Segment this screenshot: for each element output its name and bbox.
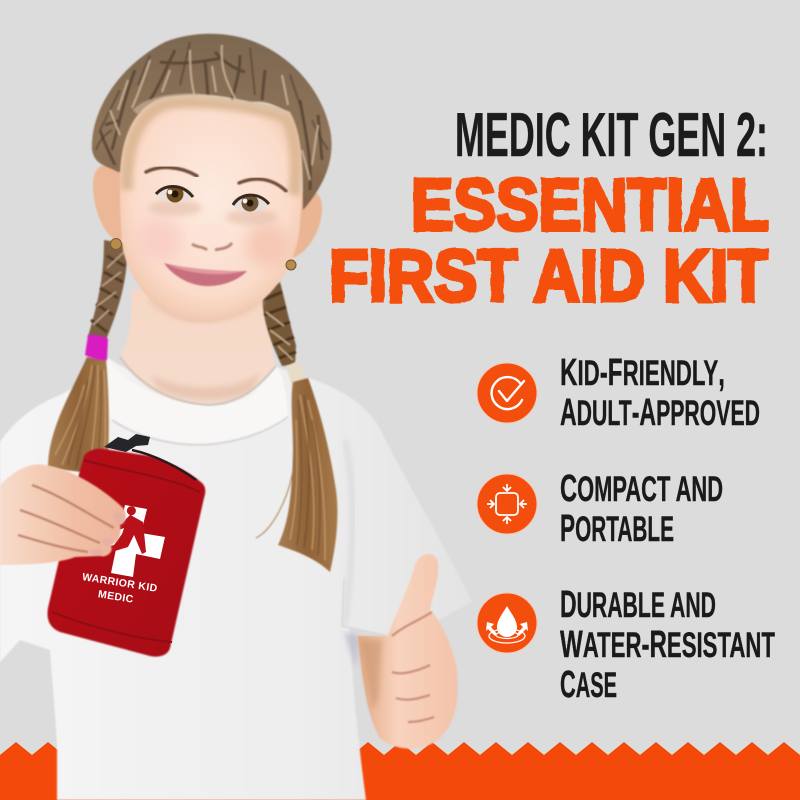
pouch brand label: WARRIOR KID	[81, 571, 158, 595]
eye: left	[156, 186, 193, 202]
pouch brand label: MEDIC	[97, 588, 134, 606]
left braid	[88, 240, 128, 340]
pink hair tie	[85, 335, 108, 360]
forearm shadow	[360, 640, 382, 710]
feature: durable	[477, 584, 775, 706]
finger nails	[90, 513, 124, 556]
earring: left	[110, 238, 122, 250]
eyebrow: right	[239, 179, 286, 191]
cream hair tie	[286, 361, 307, 386]
text: kid-friendly, adult-approved: KID-FRIENDLY,	[560, 352, 725, 394]
text: durable and water-resistant case: DURABLE AND	[560, 584, 716, 626]
forearm and thumbs-up hand	[358, 554, 458, 748]
cheek glow: left	[134, 218, 182, 262]
pouch upper seam	[84, 460, 200, 492]
collar	[108, 358, 288, 444]
photo: girl holding the first aid kit	[0, 34, 472, 800]
text: compact and portable: PORTABLE	[560, 508, 674, 550]
feature: compact	[477, 468, 723, 550]
left ear	[93, 164, 128, 242]
hairline shading	[127, 102, 296, 195]
first aid pouch	[48, 449, 205, 657]
top hair	[92, 34, 332, 210]
right ear	[285, 191, 322, 258]
text: compact and portable	[560, 468, 723, 550]
text: kid-friendly, adult-approved	[560, 352, 760, 434]
feature: kid-friendly	[477, 352, 760, 434]
pouch body	[48, 449, 205, 657]
icon: water drop with ripples	[477, 593, 537, 653]
text: durable and water-resistant case: CASE	[560, 664, 617, 706]
collar crease	[120, 357, 276, 405]
collar seam	[112, 417, 288, 445]
eye socket shadow: right	[226, 209, 278, 225]
chin shadow	[150, 300, 262, 320]
hand finger creases	[392, 612, 434, 722]
icon: check in circle	[477, 363, 537, 423]
eye socket shadow: left	[148, 200, 202, 216]
shirt sleeve seam	[345, 440, 353, 625]
nose	[187, 223, 233, 250]
sleeve hem	[342, 578, 388, 636]
zipper line	[132, 450, 196, 480]
icon: compress arrows	[477, 474, 537, 534]
neck shadow	[150, 372, 262, 400]
text: durable and water-resistant case	[560, 584, 775, 706]
finger creases	[18, 485, 114, 552]
pouch lower seam	[52, 612, 172, 642]
zipper pulls	[104, 434, 150, 452]
cheek glow: right	[246, 223, 290, 267]
right braid	[262, 282, 296, 366]
white cross	[96, 505, 165, 577]
runner silhouette	[100, 506, 146, 554]
face	[120, 95, 303, 323]
hair tail: right pigtail	[256, 378, 337, 572]
earring: right	[286, 260, 296, 270]
eyebrow: left	[146, 167, 197, 176]
white t-shirt	[0, 358, 472, 800]
hand holding the pouch	[0, 464, 126, 565]
eye: right	[232, 194, 269, 212]
smiling mouth	[164, 263, 247, 286]
pouch brand label	[81, 571, 158, 606]
orange zigzag band	[0, 742, 800, 800]
neck	[120, 280, 276, 405]
hair tail: left pigtail	[48, 357, 109, 475]
underarm shadow	[344, 632, 360, 668]
